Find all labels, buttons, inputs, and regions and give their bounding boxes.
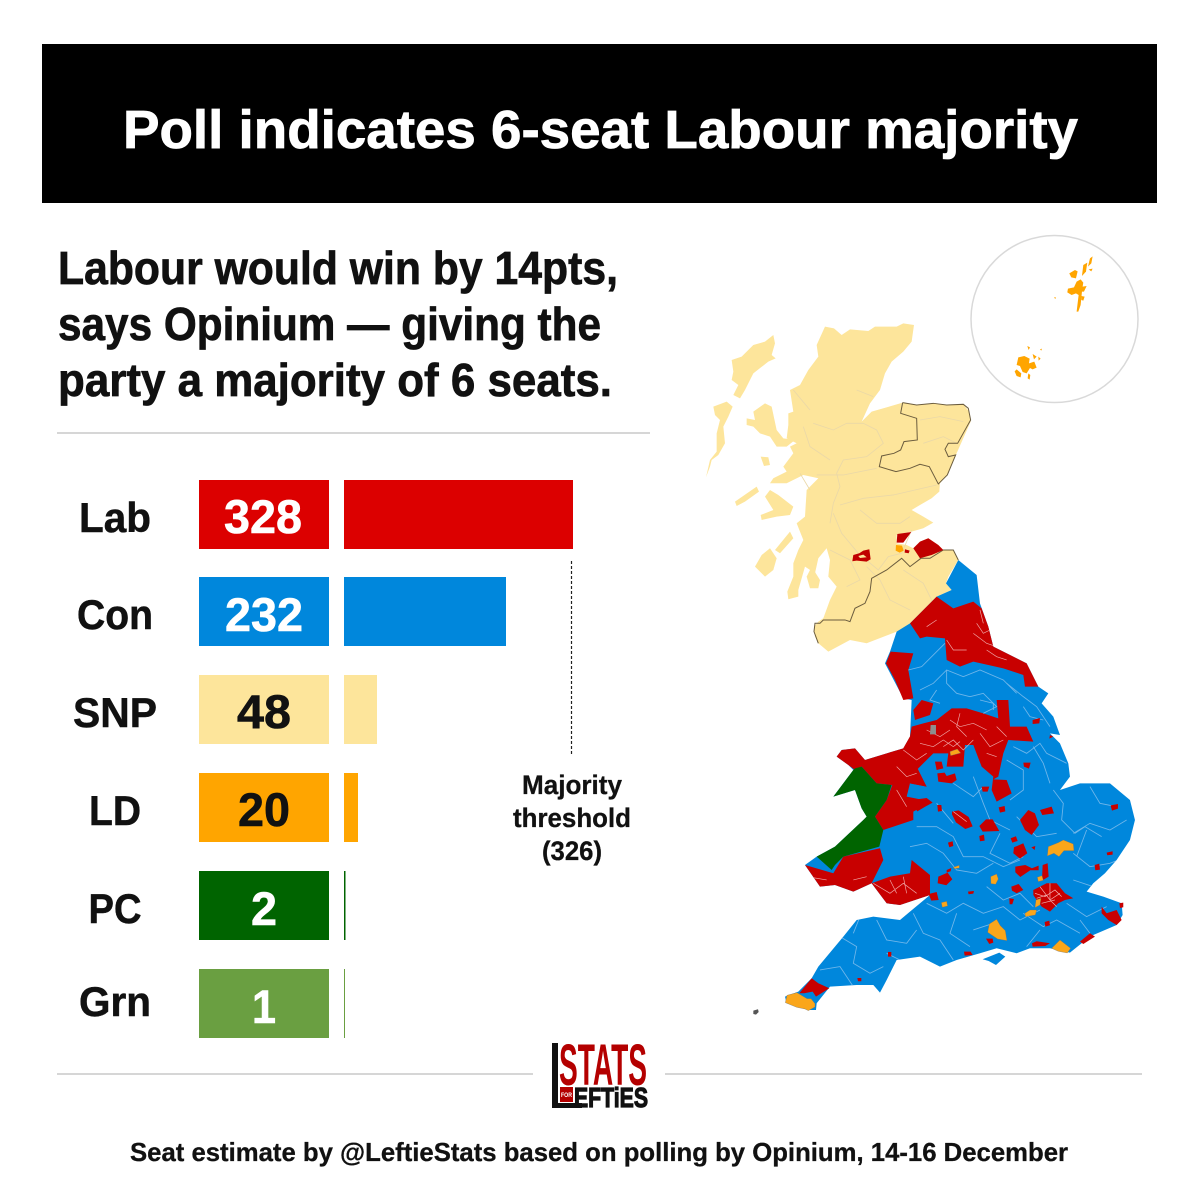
- row: Conservative: Con: [77, 591, 153, 638]
- source note: Seat estimate by @LeftieStats based on polling by Opinium, 14-16 December: [130, 1137, 1068, 1167]
- majority threshold label: (326): [542, 836, 602, 866]
- row: Labour: Lab: [79, 494, 151, 541]
- row: Liberal Democrats: 20: [238, 783, 290, 836]
- central belt labour seats: [897, 532, 911, 543]
- footer divider left: [57, 1073, 533, 1075]
- labour urban seats: [799, 718, 1123, 997]
- england and wales base: [785, 560, 1135, 1010]
- row: Plaid Cymru: 2: [251, 882, 277, 935]
- majority threshold label: Majority: [522, 770, 622, 800]
- map: England and Wales: [753, 560, 1135, 1015]
- row: Green: [79, 969, 345, 1038]
- labour mid wales: [875, 783, 932, 830]
- logo: Stats for Lefties: EFTiES: [574, 1082, 648, 1113]
- labour north wales: [837, 737, 927, 787]
- row: Green: 1: [252, 980, 276, 1033]
- scotland dark boundaries: [814, 403, 971, 643]
- labour south wales: [805, 848, 930, 905]
- header banner: [42, 44, 1157, 203]
- row: SNP: [73, 675, 377, 744]
- title: Poll indicates 6-seat Labour majority: [123, 100, 1078, 160]
- footer divider right: [665, 1073, 1142, 1075]
- isles of scilly: [753, 1009, 759, 1015]
- text: STATS: [559, 1033, 647, 1098]
- map: Northern Isles inset: [971, 236, 1138, 402]
- labour north west and yorkshire: [903, 700, 1033, 802]
- logo: Stats for Lefties: FOR: [561, 1093, 573, 1099]
- row: Green: Grn: [79, 978, 151, 1025]
- mainland: [770, 323, 971, 652]
- row: Plaid Cymru: [88, 871, 346, 940]
- row: SNP: SNP: [73, 689, 157, 736]
- edinburgh lib dem seat: [896, 545, 904, 553]
- gray speaker seat: [930, 725, 936, 734]
- majority threshold line: [570, 561, 572, 755]
- subtitle text block: party a majority of 6 seats.: [58, 354, 612, 406]
- majority threshold label: threshold: [513, 803, 631, 833]
- row: Plaid Cymru: PC: [88, 885, 142, 932]
- row: Conservative: [77, 577, 506, 646]
- row: Liberal Democrats: [89, 773, 358, 842]
- outer hebrides and islands: [706, 335, 820, 588]
- boundary lines blue: [820, 643, 1127, 987]
- map: Scotland: [706, 323, 971, 652]
- lib dem seats: [785, 749, 1074, 1011]
- subtitle text block: says Opinium — giving the: [58, 298, 601, 350]
- majority threshold label: [513, 770, 631, 866]
- isle of wight: [983, 953, 1005, 965]
- row: Labour: [79, 480, 573, 549]
- labour lancashire: [913, 700, 933, 720]
- london: [1033, 883, 1073, 912]
- labour north east: [910, 597, 1038, 687]
- plaid cymru seats: [817, 767, 892, 870]
- bar chart: seat estimates: [73, 480, 573, 1038]
- row: Labour: 328: [224, 490, 302, 543]
- subtitle text block: Labour would win by 14pts,: [58, 242, 618, 294]
- logo: Stats for Lefties: [552, 1033, 648, 1113]
- scotland constituency boundaries: [793, 390, 963, 610]
- boundary lines on labour areas: [807, 610, 1007, 893]
- labour cumbria: [886, 652, 913, 700]
- subtitle text block: [58, 242, 618, 406]
- row: SNP: 48: [237, 685, 291, 738]
- row: Conservative: 232: [225, 588, 303, 641]
- row: Liberal Democrats: LD: [89, 787, 141, 834]
